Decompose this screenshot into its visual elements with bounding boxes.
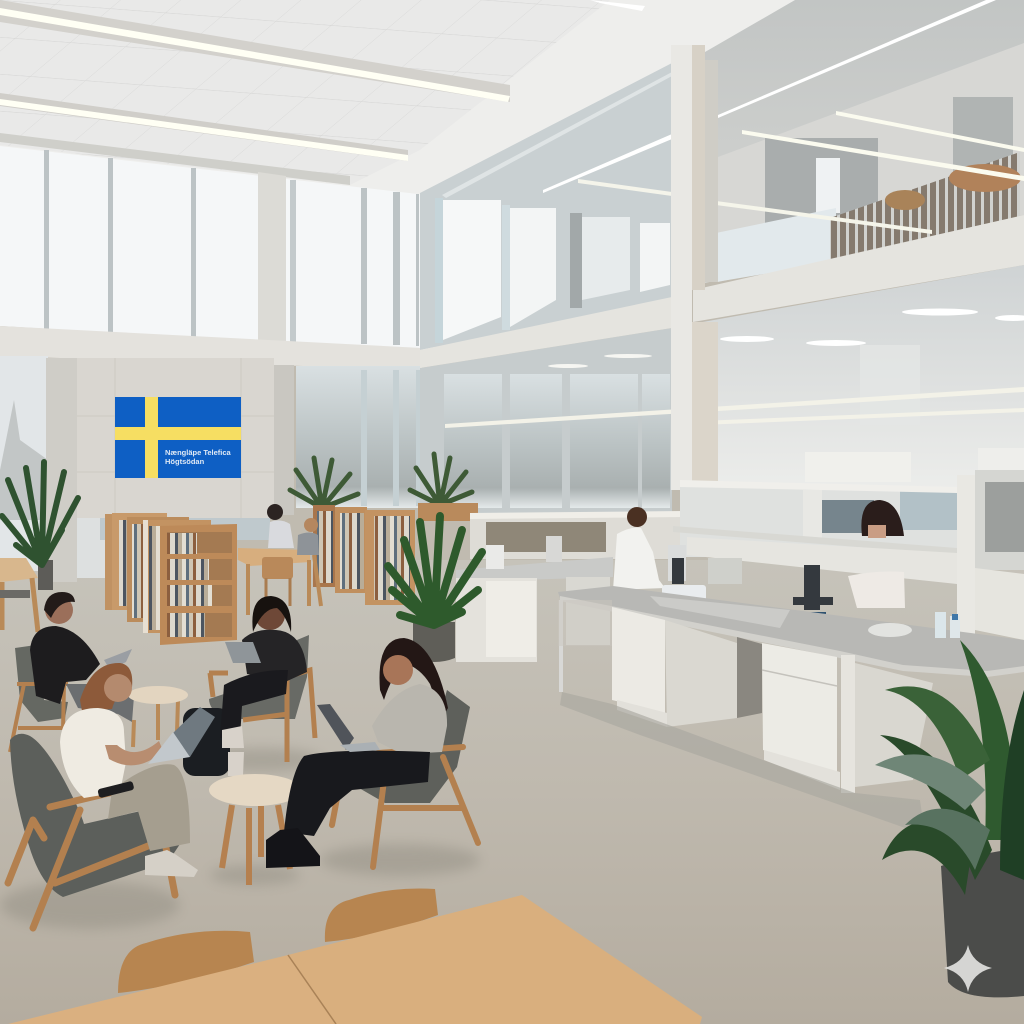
right lower glass lab wall (445, 265, 1024, 490)
bookshelves right (313, 503, 478, 605)
round table back (128, 686, 188, 747)
person: man with laptop, back left (10, 592, 134, 752)
right upper glass mezzanine (705, 0, 1024, 283)
background: floor (0, 560, 1024, 1024)
microscopes (662, 545, 833, 627)
flag screen with caption (115, 397, 241, 478)
display wall (46, 358, 294, 582)
central lower glass (420, 328, 672, 515)
back left table (0, 558, 38, 632)
central potted plant (388, 516, 482, 662)
left window wall, lower (0, 356, 422, 578)
main lab bench (558, 586, 1024, 793)
left potted plant (2, 462, 78, 590)
flag screen with caption: Nængläpe Telefica (165, 448, 232, 457)
ceiling (0, 0, 1024, 200)
lab floor band (560, 692, 925, 835)
left window wall, upper (0, 146, 435, 352)
pillar (671, 45, 718, 492)
soft chair shadows (0, 748, 480, 929)
central glass block (420, 63, 672, 350)
right foreground plant with pot (875, 640, 1024, 997)
scientist seated at lab (848, 500, 905, 608)
round table front (209, 774, 301, 885)
outdoor plants behind windows (290, 454, 472, 508)
foreground table with chairs (8, 888, 702, 1024)
flag screen with caption: Högtsödan (165, 457, 205, 466)
beam between storeys (0, 326, 422, 370)
watermark star icon (944, 945, 992, 992)
right beam (693, 215, 1024, 322)
bookshelves left (105, 513, 237, 645)
person: woman foreground left with laptop (8, 663, 215, 928)
back lab bench (456, 511, 683, 662)
central beam (420, 297, 672, 368)
main lab shelf unit (673, 470, 1024, 640)
scientist standing (613, 507, 665, 590)
back table with students (238, 504, 321, 615)
person: woman on chair with laptop, centre back (183, 596, 315, 776)
person: woman foreground centre with laptop (266, 638, 478, 868)
